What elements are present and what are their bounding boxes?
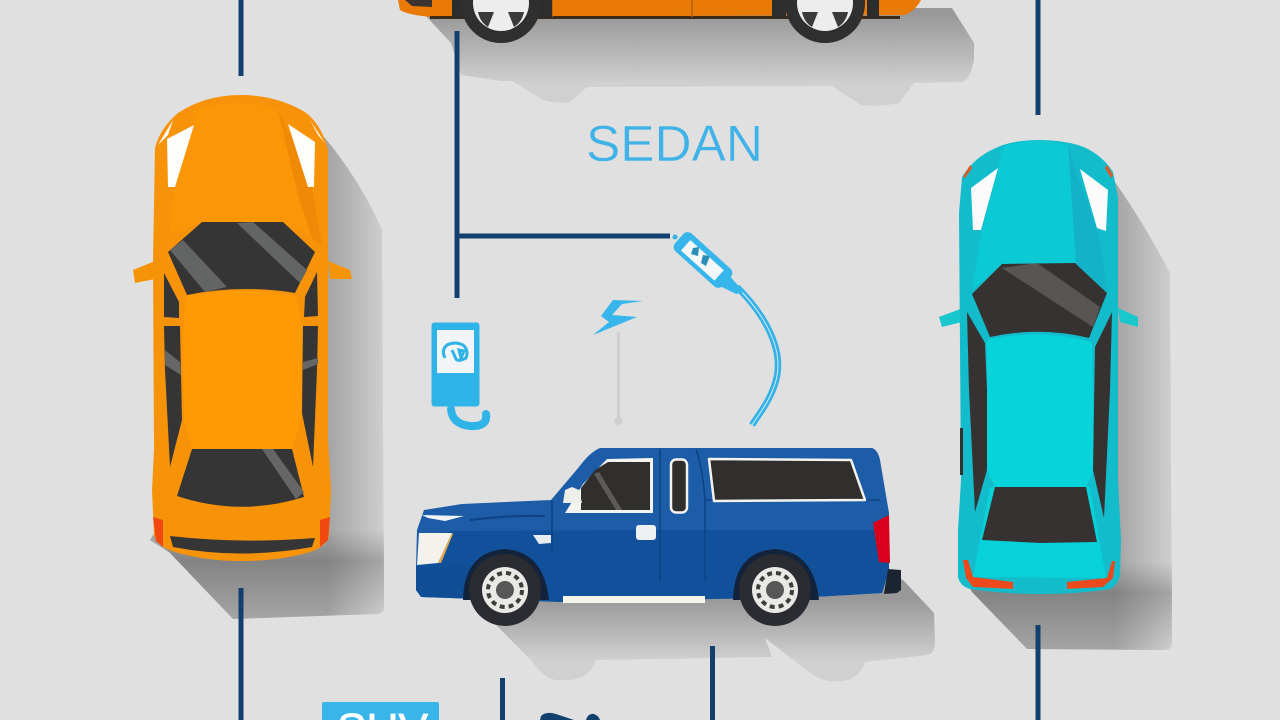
rear window xyxy=(177,449,304,507)
partial dark icon at bottom edge xyxy=(540,713,600,720)
blue pickup truck side view xyxy=(416,448,901,626)
truck body xyxy=(416,448,889,602)
right teal car top view xyxy=(939,140,1138,594)
tail light xyxy=(873,515,890,563)
upper light strip xyxy=(422,515,464,521)
long rear window xyxy=(709,459,865,501)
lower body panel xyxy=(416,530,889,602)
body xyxy=(958,140,1121,594)
small cab window xyxy=(671,460,687,512)
hood crease xyxy=(470,516,545,520)
top orange sedan shadow xyxy=(424,8,974,106)
tail lights xyxy=(153,517,330,547)
rear bumper xyxy=(884,569,901,594)
headlights xyxy=(158,120,325,187)
plug screen glyphs xyxy=(691,247,710,266)
mirrors xyxy=(939,308,1138,327)
front wheel xyxy=(461,0,541,43)
roof xyxy=(183,290,303,449)
title label: SEDAN: SEDAN xyxy=(586,115,763,172)
headlight xyxy=(417,533,452,565)
charging plug and cable icon xyxy=(671,230,778,425)
wheel arches xyxy=(463,549,819,600)
headlights xyxy=(971,168,1108,231)
front window xyxy=(565,458,653,513)
rear vent xyxy=(170,536,315,554)
station cable hook xyxy=(451,409,486,426)
running board xyxy=(563,596,705,603)
SUV label badge xyxy=(322,702,439,720)
lightning bolt and pole icon xyxy=(593,300,643,425)
top orange sedan side view xyxy=(398,0,921,43)
body xyxy=(152,95,331,561)
gauge glyph xyxy=(443,343,467,360)
fender badge xyxy=(533,535,551,544)
bumper xyxy=(416,565,470,598)
door handle xyxy=(636,525,656,540)
tail lights xyxy=(963,560,1115,589)
roof xyxy=(987,334,1094,487)
hood panel xyxy=(170,102,312,235)
charging station icon xyxy=(432,322,486,426)
rear wheel xyxy=(739,554,811,626)
side mirror xyxy=(563,487,582,503)
connector lines xyxy=(238,0,1040,720)
mirrors xyxy=(133,261,352,283)
left orange car top view xyxy=(133,95,352,561)
side windows xyxy=(164,272,318,467)
plug screen xyxy=(681,240,724,281)
plug body xyxy=(671,230,735,290)
windshield xyxy=(972,263,1107,338)
front marker lights xyxy=(963,165,1113,178)
rear wheel xyxy=(785,0,865,43)
front wheel xyxy=(469,554,541,626)
right teal car shadow xyxy=(960,170,1172,650)
blue pickup shadow xyxy=(480,570,935,682)
windshield xyxy=(168,222,315,295)
hood panel xyxy=(972,141,1080,290)
door lines xyxy=(552,449,880,582)
rear window xyxy=(982,487,1097,543)
trunk xyxy=(973,487,1106,578)
left orange car shadow xyxy=(150,130,384,619)
plug neck xyxy=(716,272,744,294)
side windows xyxy=(967,312,1112,518)
station screen xyxy=(437,330,474,373)
